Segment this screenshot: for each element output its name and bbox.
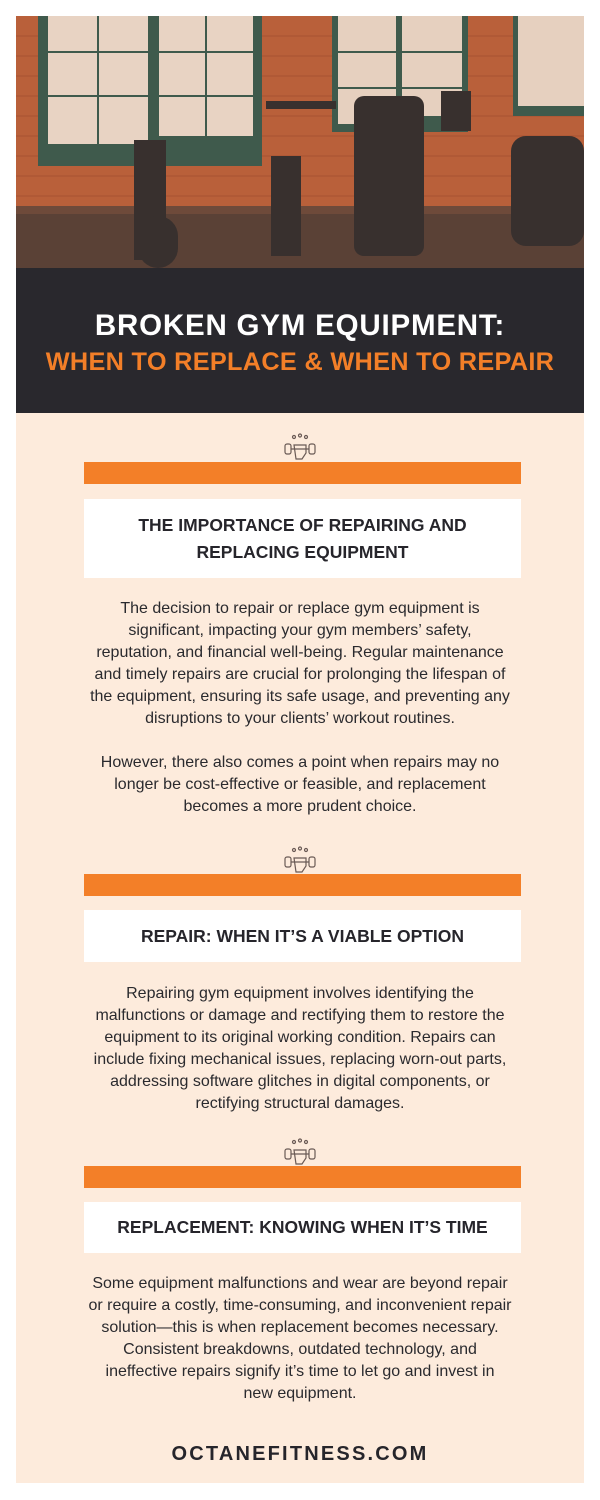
bar 1 [84, 462, 521, 484]
heading 1: REPLACING EQUIPMENT [196, 542, 408, 562]
text block 3: Some equipment malfunctions and wear are beyond repair [92, 1275, 508, 1292]
heading 1 [84, 499, 521, 578]
text block 3: ineffective repairs signify it’s time to let go and invest in [106, 1363, 494, 1380]
icon: dumbbell fist [284, 433, 316, 460]
text block 2: equipment to its original working condition. Repairs can [104, 1029, 496, 1046]
text block 2: include fixing mechanical issues, replacing worn-out parts, [94, 1051, 506, 1068]
text block 1 [90, 600, 510, 815]
header: title block [16, 268, 584, 413]
icon: dumbbell fist [284, 846, 316, 873]
text block 2: addressing software glitches in digital components, or [110, 1073, 490, 1090]
text block 1: However, there also comes a point when repairs may no [101, 754, 499, 771]
cream content panel [16, 413, 584, 1483]
text block 3 [88, 1275, 512, 1402]
text block 2: malfunctions or damage and rectifying them to restore the [95, 1007, 505, 1024]
heading 2 [84, 910, 521, 962]
text block 1: The decision to repair or replace gym equipment is [120, 600, 480, 617]
photo: gym with bikes [16, 16, 584, 268]
text block 2: Repairing gym equipment involves identifying the [126, 985, 474, 1002]
text block 1: becomes a more prudent choice. [183, 798, 416, 815]
title line 1: BROKEN GYM EQUIPMENT: [95, 309, 505, 342]
text block 3: new equipment. [244, 1385, 356, 1402]
icon: dumbbell fist [284, 1138, 316, 1165]
text block 1: reputation, and financial well-being. Regular maintenance [96, 644, 504, 661]
heading 1: THE IMPORTANCE OF REPAIRING AND [138, 514, 467, 534]
text block 3: or require a costly, time-consuming, and inconvenient repair [88, 1297, 512, 1314]
text block 1: significant, impacting your gym members’ safety, [128, 622, 472, 639]
text block 1: the equipment, ensuring its safe usage, and preventing any [90, 688, 510, 705]
heading 2: REPAIR: WHEN IT’S A VIABLE OPTION [141, 926, 464, 946]
heading 3 [84, 1202, 521, 1253]
text block 3: Consistent breakdowns, outdated technology, and [123, 1341, 477, 1358]
footer: website: OCTANEFITNESS.COM [171, 1443, 429, 1465]
text block 1: and timely repairs are crucial for prolonging the lifespan of [95, 666, 505, 683]
title line 2: WHEN TO REPLACE & WHEN TO REPAIR [46, 348, 554, 376]
heading 3: REPLACEMENT: KNOWING WHEN IT’S TIME [117, 1217, 488, 1237]
text block 2: rectifying structural damages. [196, 1095, 404, 1112]
bar 2 [84, 874, 521, 896]
text block 1: longer be cost-effective or feasible, and replacement [114, 776, 486, 793]
bar 3 [84, 1166, 521, 1188]
text block 1: disruptions to your clients’ workout routines. [145, 710, 455, 727]
text block 2 [94, 985, 506, 1112]
text block 3: solution—this is when replacement becomes necessary. [101, 1319, 499, 1336]
